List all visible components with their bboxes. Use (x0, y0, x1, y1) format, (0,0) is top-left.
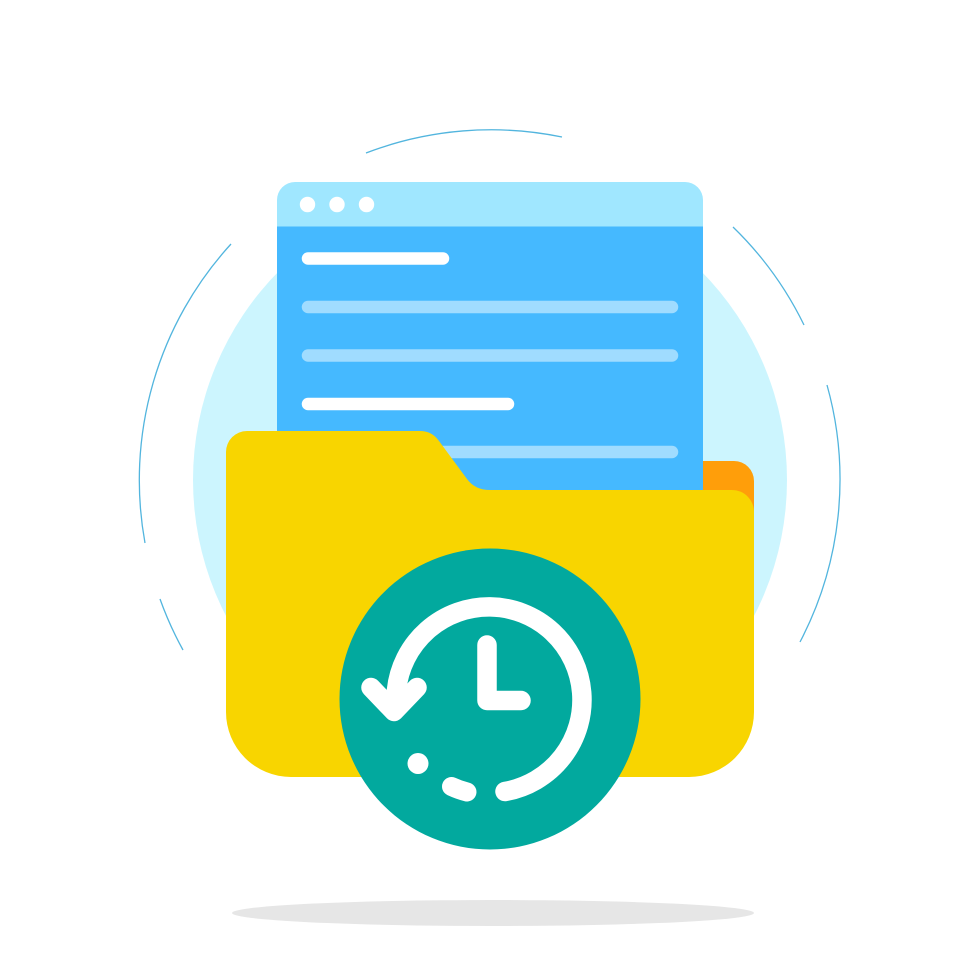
dashed trail (452, 786, 467, 792)
clock hands (487, 645, 521, 700)
folder back tab (660, 461, 754, 540)
folder front (226, 431, 754, 777)
window body (277, 220, 703, 520)
background circle (193, 183, 787, 777)
window dots (300, 197, 374, 212)
text lines (308, 258, 672, 452)
history arc (394, 607, 582, 792)
arrow head (371, 688, 417, 712)
document window (277, 182, 703, 520)
ground shadow (232, 900, 754, 926)
clock badge (340, 548, 640, 850)
badge circle (340, 548, 640, 850)
trail dot (408, 753, 428, 774)
window title bar (277, 182, 703, 226)
orbit arcs (139, 130, 840, 650)
